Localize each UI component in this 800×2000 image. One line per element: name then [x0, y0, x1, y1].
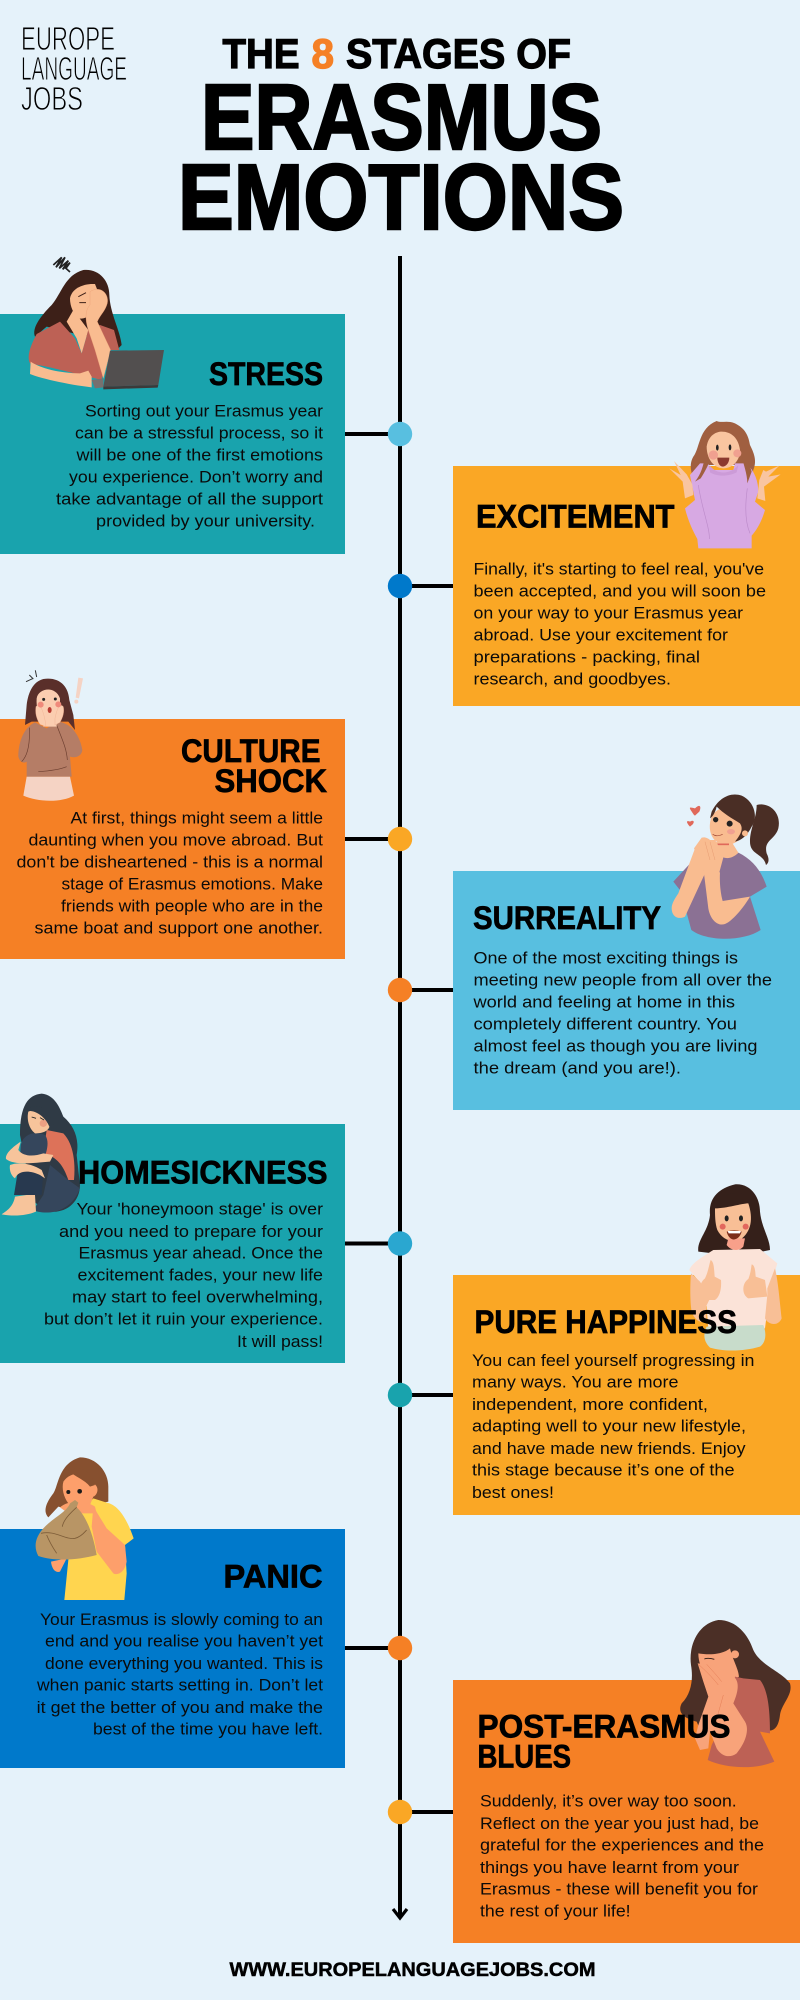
- timeline node: culture shock: [345, 827, 412, 851]
- heading: BLUES: [478, 1738, 571, 1774]
- text block: Suddenly, it’s over way too soon.: [480, 1792, 737, 1811]
- heading: STRESS: [209, 356, 323, 392]
- text block: Your 'honeymoon stage' is over: [76, 1200, 323, 1219]
- timeline node: pure happiness: [388, 1383, 453, 1407]
- text block: stage of Erasmus emotions. Make: [62, 875, 323, 894]
- title: THE: [222, 30, 300, 77]
- icon: panicking woman with paper bag: [36, 1457, 134, 1600]
- title: 8: [312, 30, 334, 77]
- timeline node: excitement: [388, 574, 453, 598]
- text block: One of the most exciting things is: [474, 949, 738, 968]
- text block: may start to feel overwhelming,: [72, 1288, 323, 1307]
- text block: [474, 560, 766, 688]
- text block: many ways. You are more: [472, 1373, 678, 1392]
- text block: but don’t let it ruin your experience.: [44, 1310, 323, 1328]
- timeline node: post-Erasmus blues: [388, 1800, 453, 1824]
- text block: done everything you wanted. This is: [45, 1654, 323, 1673]
- text block: daunting when you move abroad. But: [28, 831, 323, 850]
- text block: take advantage of all the support: [56, 490, 323, 508]
- text block: At first, things might seem a little: [70, 808, 323, 828]
- heading: EXCITEMENT: [476, 498, 675, 534]
- icon: shocked woman: [18, 670, 83, 801]
- text block: Finally, it's starting to feel real, you've: [474, 560, 764, 578]
- heading: CULTURE: [181, 733, 320, 769]
- text block: the rest of your life!: [480, 1902, 631, 1920]
- text block: and you need to prepare for your: [59, 1222, 323, 1241]
- text block: [480, 1792, 764, 1920]
- icon: crying woman: [680, 1620, 791, 1767]
- icon: sad woman hugging knees: [2, 1094, 80, 1216]
- text block: excitement fades, your new life: [78, 1266, 323, 1284]
- timeline arrow: [393, 256, 407, 1918]
- text block: [44, 1200, 323, 1351]
- heading: PURE HAPPINESS: [474, 1304, 737, 1340]
- icon: excited woman: [669, 421, 781, 548]
- text block: completely different country. You: [474, 1014, 737, 1034]
- text block: meeting new people from all over the: [474, 970, 772, 990]
- text block: adapting well to your new lifestyle,: [472, 1417, 746, 1436]
- text block: Erasmus year ahead. Once the: [78, 1244, 323, 1263]
- panel: panic: [0, 1457, 345, 1768]
- title: STAGES OF: [346, 30, 571, 77]
- timeline node: surreality: [388, 978, 453, 1002]
- text block: been accepted, and you will soon be: [474, 582, 766, 600]
- text block: Your Erasmus is slowly coming to an: [40, 1610, 323, 1629]
- text block: preparations - packing, final: [474, 648, 700, 667]
- text block: independent, more confident,: [472, 1395, 708, 1414]
- text block: same boat and support one another.: [34, 918, 323, 938]
- text block: almost feel as though you are living: [474, 1037, 758, 1056]
- text block: abroad. Use your excitement for: [474, 626, 728, 644]
- panel: pure happiness: [453, 1184, 800, 1515]
- text block: it get the better of you and make the: [37, 1698, 323, 1717]
- heading: PANIC: [224, 1558, 322, 1594]
- icon: dreamy woman with hearts: [672, 795, 779, 939]
- panel: excitement: [453, 421, 800, 706]
- text block: on your way to your Erasmus year: [474, 604, 743, 623]
- heading: SHOCK: [214, 763, 327, 799]
- text block: friends with people who are in the: [61, 897, 323, 916]
- logo: Europe Language Jobs: LANGUAGE: [21, 50, 127, 87]
- text block: grateful for the experiences and the: [480, 1836, 764, 1855]
- panel: surreality: [453, 795, 800, 1110]
- panel: post-Erasmus blues: [453, 1620, 800, 1943]
- text block: will be one of the first emotions: [75, 446, 323, 464]
- text block: It will pass!: [237, 1332, 323, 1351]
- text block: Erasmus - these will benefit you for: [480, 1880, 758, 1899]
- panel: culture shock: [0, 670, 345, 959]
- icon: happy woman thumbs up: [689, 1184, 782, 1351]
- heading: SURREALITY: [473, 900, 661, 936]
- text block: best ones!: [472, 1483, 554, 1502]
- timeline node: homesickness: [345, 1231, 412, 1256]
- title: [178, 30, 624, 249]
- text block: and have made new friends. Enjoy: [472, 1439, 746, 1458]
- logo: Europe Language Jobs: [21, 20, 127, 117]
- text block: this stage because it’s one of the: [472, 1461, 734, 1480]
- timeline node: panic: [345, 1636, 412, 1660]
- text block: provided by your university.: [96, 512, 315, 530]
- heading: [478, 1708, 730, 1774]
- heading: [181, 733, 327, 799]
- text block: things you have learnt from your: [480, 1858, 739, 1877]
- timeline node: stress: [345, 422, 412, 446]
- text block: the dream (and you are!).: [474, 1058, 681, 1078]
- title: ERASMUS: [201, 65, 602, 169]
- text block: [56, 402, 323, 530]
- text block: you experience. Don’t worry and: [69, 468, 323, 486]
- text block: don't be disheartened - this is a normal: [16, 852, 323, 871]
- logo: Europe Language Jobs: EUROPE: [21, 20, 115, 57]
- text block: research, and goodbyes.: [474, 670, 671, 688]
- text block: [36, 1610, 323, 1739]
- text block: [16, 808, 323, 938]
- text block: You can feel yourself progressing in: [472, 1351, 754, 1370]
- heading: HOMESICKNESS: [78, 1154, 328, 1190]
- logo: Europe Language Jobs: JOBS: [21, 80, 83, 117]
- text block: best of the time you have left.: [93, 1720, 323, 1739]
- text block: world and feeling at home in this: [472, 993, 735, 1012]
- footer website: WWW.EUROPELANGUAGEJOBS.COM: [230, 1960, 596, 1981]
- panel: homesickness: [0, 1094, 345, 1363]
- title: EMOTIONS: [178, 145, 624, 249]
- heading: POST-ERASMUS: [478, 1708, 730, 1744]
- text block: Sorting out your Erasmus year: [85, 402, 323, 420]
- text block: end and you realise you haven’t yet: [45, 1632, 323, 1651]
- text block: [472, 1351, 754, 1502]
- text block: when panic starts setting in. Don’t let: [36, 1676, 323, 1695]
- icon: stressed woman at laptop: [29, 257, 164, 389]
- text block: [472, 949, 772, 1078]
- text block: Reflect on the year you just had, be: [480, 1814, 759, 1833]
- panel: stress: [0, 257, 345, 554]
- text block: can be a stressful process, so it: [75, 424, 323, 442]
